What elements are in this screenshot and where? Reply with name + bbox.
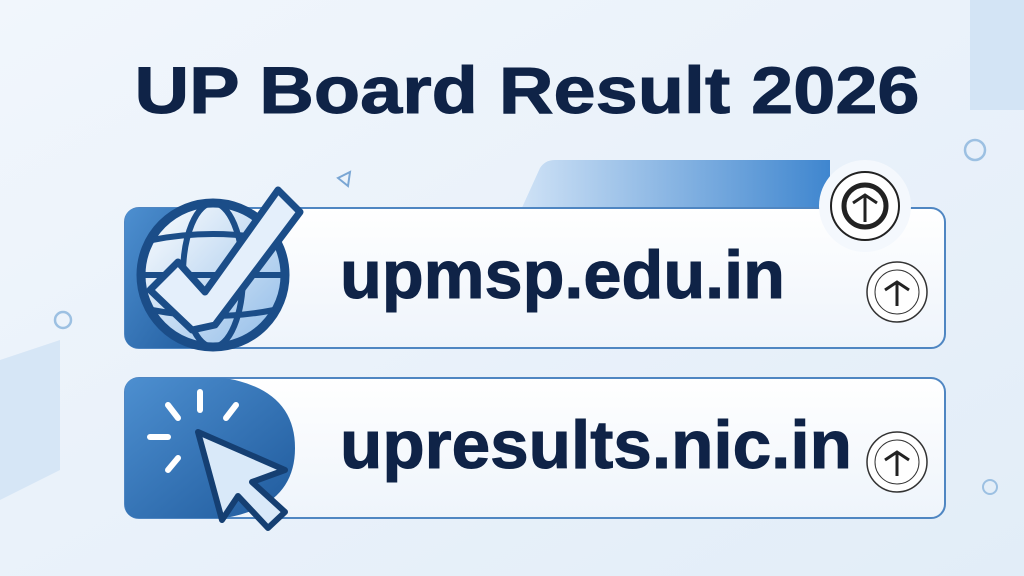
card 2 [125, 378, 945, 528]
card 2 cap [125, 378, 295, 518]
emblem 2 [867, 432, 927, 492]
decorative triangle icon [338, 172, 350, 186]
blue tab behind card 1 [520, 160, 830, 212]
url text 1: upmsp.edu.in [340, 237, 785, 313]
card 1 cap [125, 208, 215, 348]
url text 2: upresults.nic.in [340, 407, 852, 483]
emblem 1 [867, 262, 927, 322]
title: UP Board Result 2026 [134, 53, 920, 127]
badge: UP board logo [819, 160, 911, 252]
card 1 [125, 190, 945, 348]
icon: globe with check [141, 190, 300, 347]
icon: click cursor [150, 392, 285, 528]
